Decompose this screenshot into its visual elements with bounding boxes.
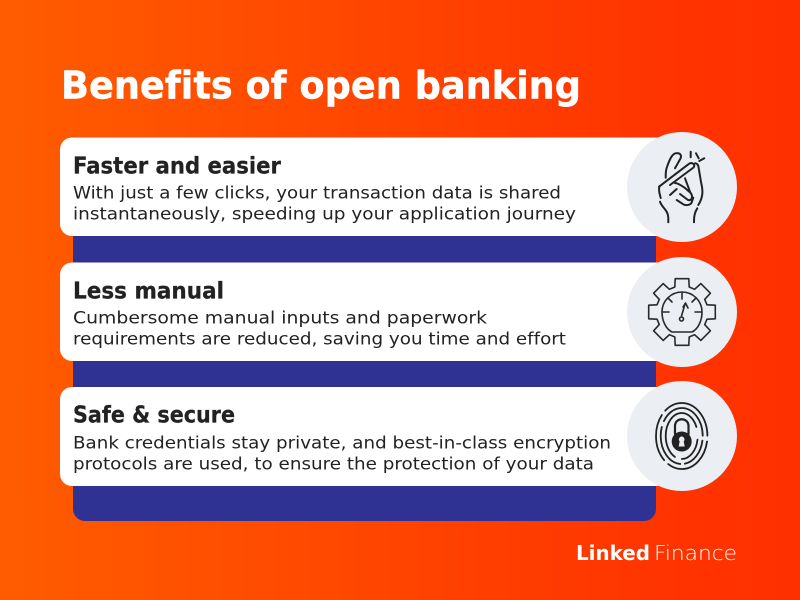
heading: less manual: Less manual <box>73 278 224 304</box>
icon: fingerprint padlock <box>627 381 737 491</box>
panel: faster and easier <box>60 138 670 236</box>
text: faster and easier description: With just a few clicks, your transaction data is shared <box>73 184 561 204</box>
logo: Linked Finance <box>576 541 737 565</box>
text: safe and secure description: Bank credentials stay private, and best-in-class encryption <box>73 434 611 454</box>
text: less manual description: Cumbersome manual inputs and paperwork <box>73 308 487 328</box>
icon: gear with gauge <box>627 257 737 367</box>
text: faster and easier description: instantaneously, speeding up your application journey <box>73 204 576 224</box>
blue backing panel <box>73 200 656 521</box>
icon: snapping fingers <box>627 132 737 242</box>
heading: faster and easier: Faster and easier <box>73 154 282 180</box>
heading: safe and secure: Safe & secure <box>73 402 235 428</box>
logo: Linked Finance: Linked <box>576 541 650 565</box>
panel: less manual <box>60 262 670 361</box>
title: Benefits of open banking <box>61 64 581 108</box>
text: safe and secure description: protocols are used, to ensure the protection of your data <box>73 454 594 474</box>
text: less manual description: requirements are reduced, saving you time and effort <box>73 330 566 350</box>
panel: safe and secure <box>60 387 670 486</box>
logo: Linked Finance: Finance <box>654 541 737 565</box>
